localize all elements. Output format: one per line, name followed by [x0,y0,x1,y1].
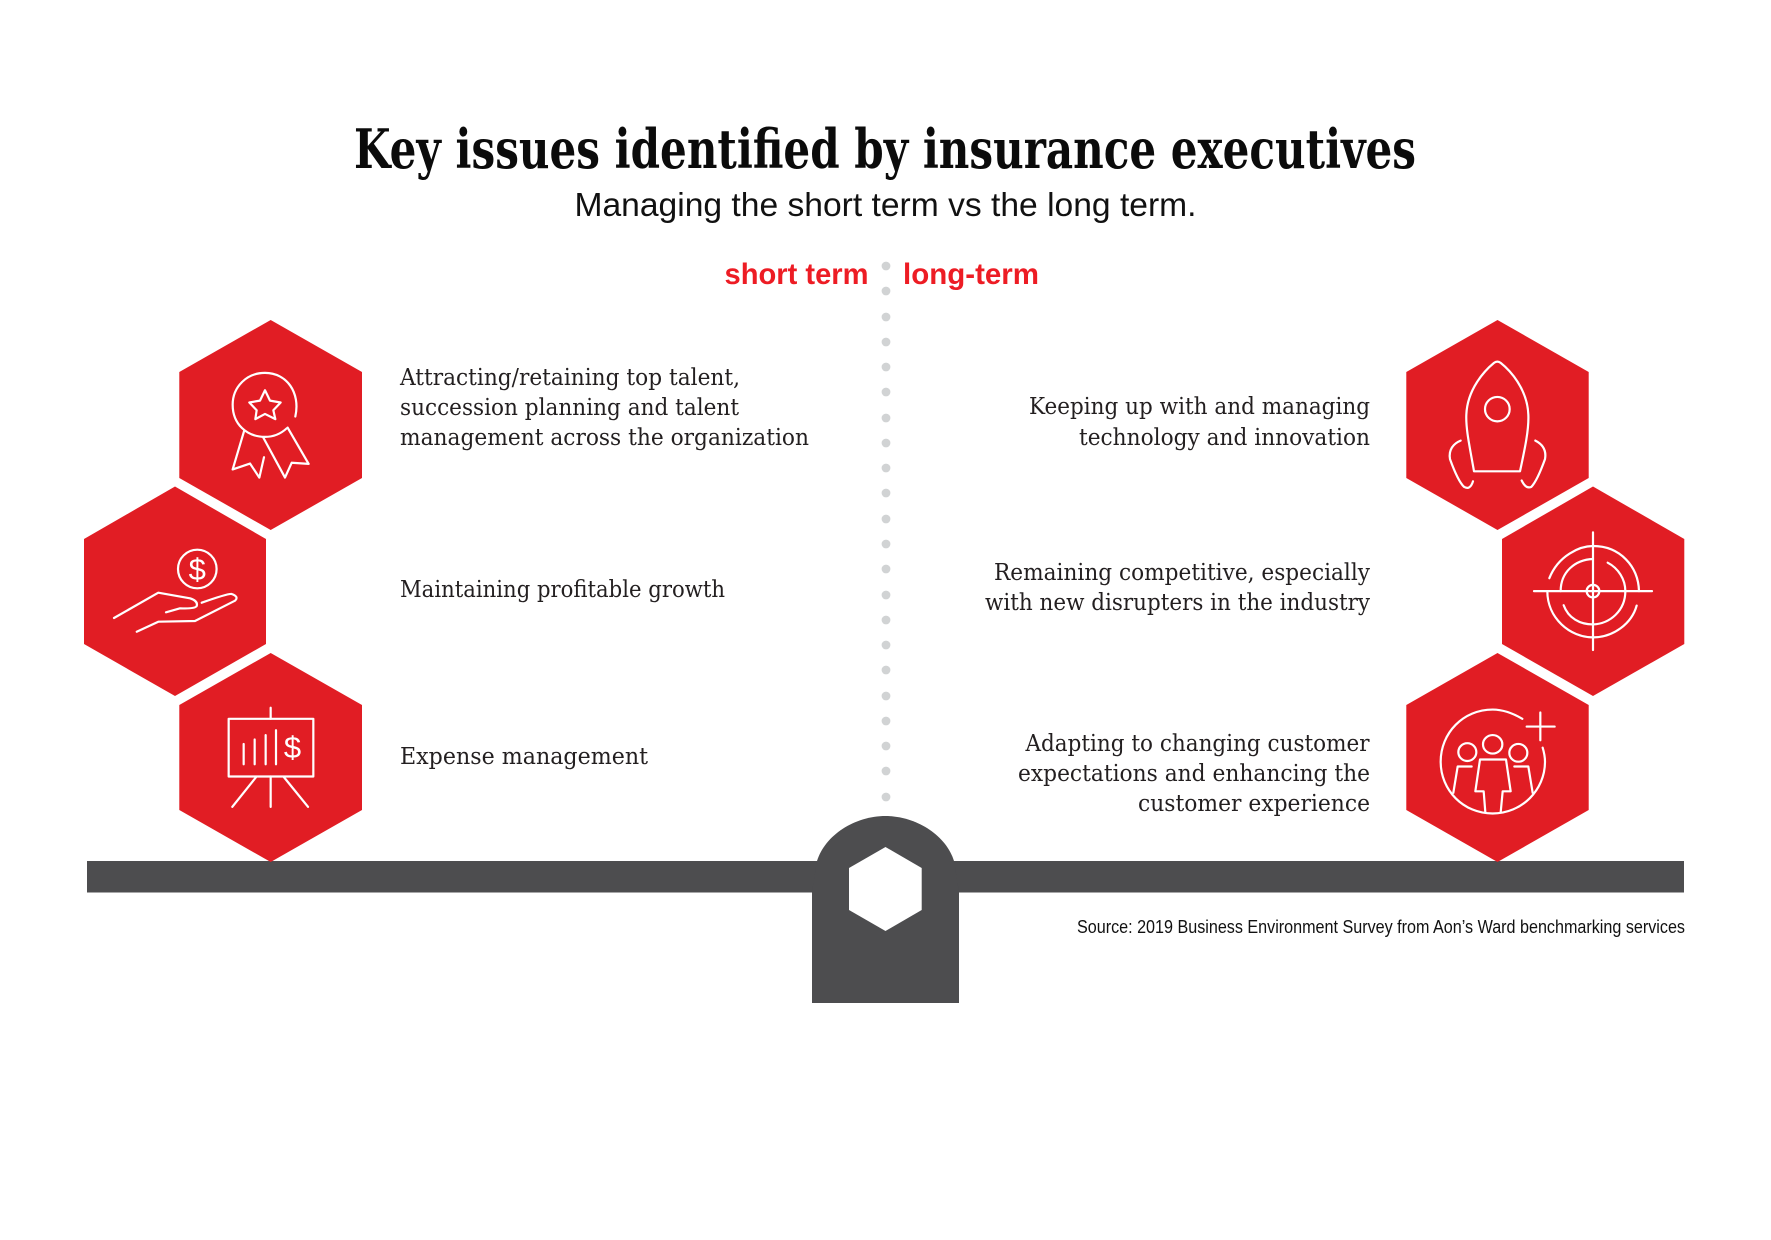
text: technology: technology and innovation [1079,423,1370,451]
icon: presentation board [229,708,313,807]
icon: rocket [1450,362,1545,488]
text: technology [1029,392,1370,451]
text: talent: management across the organization [400,423,809,451]
text: technology: Keeping up with and managing [1029,392,1370,420]
white hexagon in fulcrum [849,847,922,931]
dotted divider [882,262,890,801]
text: talent [399,363,809,451]
hexagon: technology [1406,320,1589,530]
text: talent: succession planning and talent [400,393,740,421]
icon: hand with coin [114,550,237,632]
text: customers: customer experience [1138,789,1370,817]
title: Key issues identified by insurance executives [354,117,1416,181]
icon: presentation board: $ [284,730,301,765]
source note: Source: 2019 Business Environment Survey from Aon’s Ward benchmarking services [1077,917,1685,937]
text: customers: expectations and enhancing the [1018,759,1370,787]
text: expense management: Expense management [400,742,649,770]
text: profitable growth: Maintaining profitable growth [400,575,725,603]
text: competition [985,558,1371,616]
balance beam and fulcrum [87,816,1684,1003]
text: competition: Remaining competitive, especially [994,558,1371,586]
heading: long-term: long-term [903,258,1039,291]
hexagon: customers [1406,653,1589,862]
hexagon: profit [84,486,266,696]
text: customers: Adapting to changing customer [1025,729,1370,757]
icon: target [1534,532,1652,650]
hexagon: expense [179,653,362,862]
heading: short term: short term [724,258,868,291]
text: competition: with new disrupters in the industry [985,588,1371,616]
text: talent: Attracting/retaining top talent, [399,363,740,391]
subtitle: Managing the short term vs the long term. [574,186,1196,223]
icon: medal [233,373,309,478]
icon: hand with coin: $ [189,552,206,587]
icon: customer group [1441,710,1555,814]
hexagon: talent [179,320,362,530]
text: customers [1018,729,1370,817]
hexagon: competition [1502,486,1684,696]
